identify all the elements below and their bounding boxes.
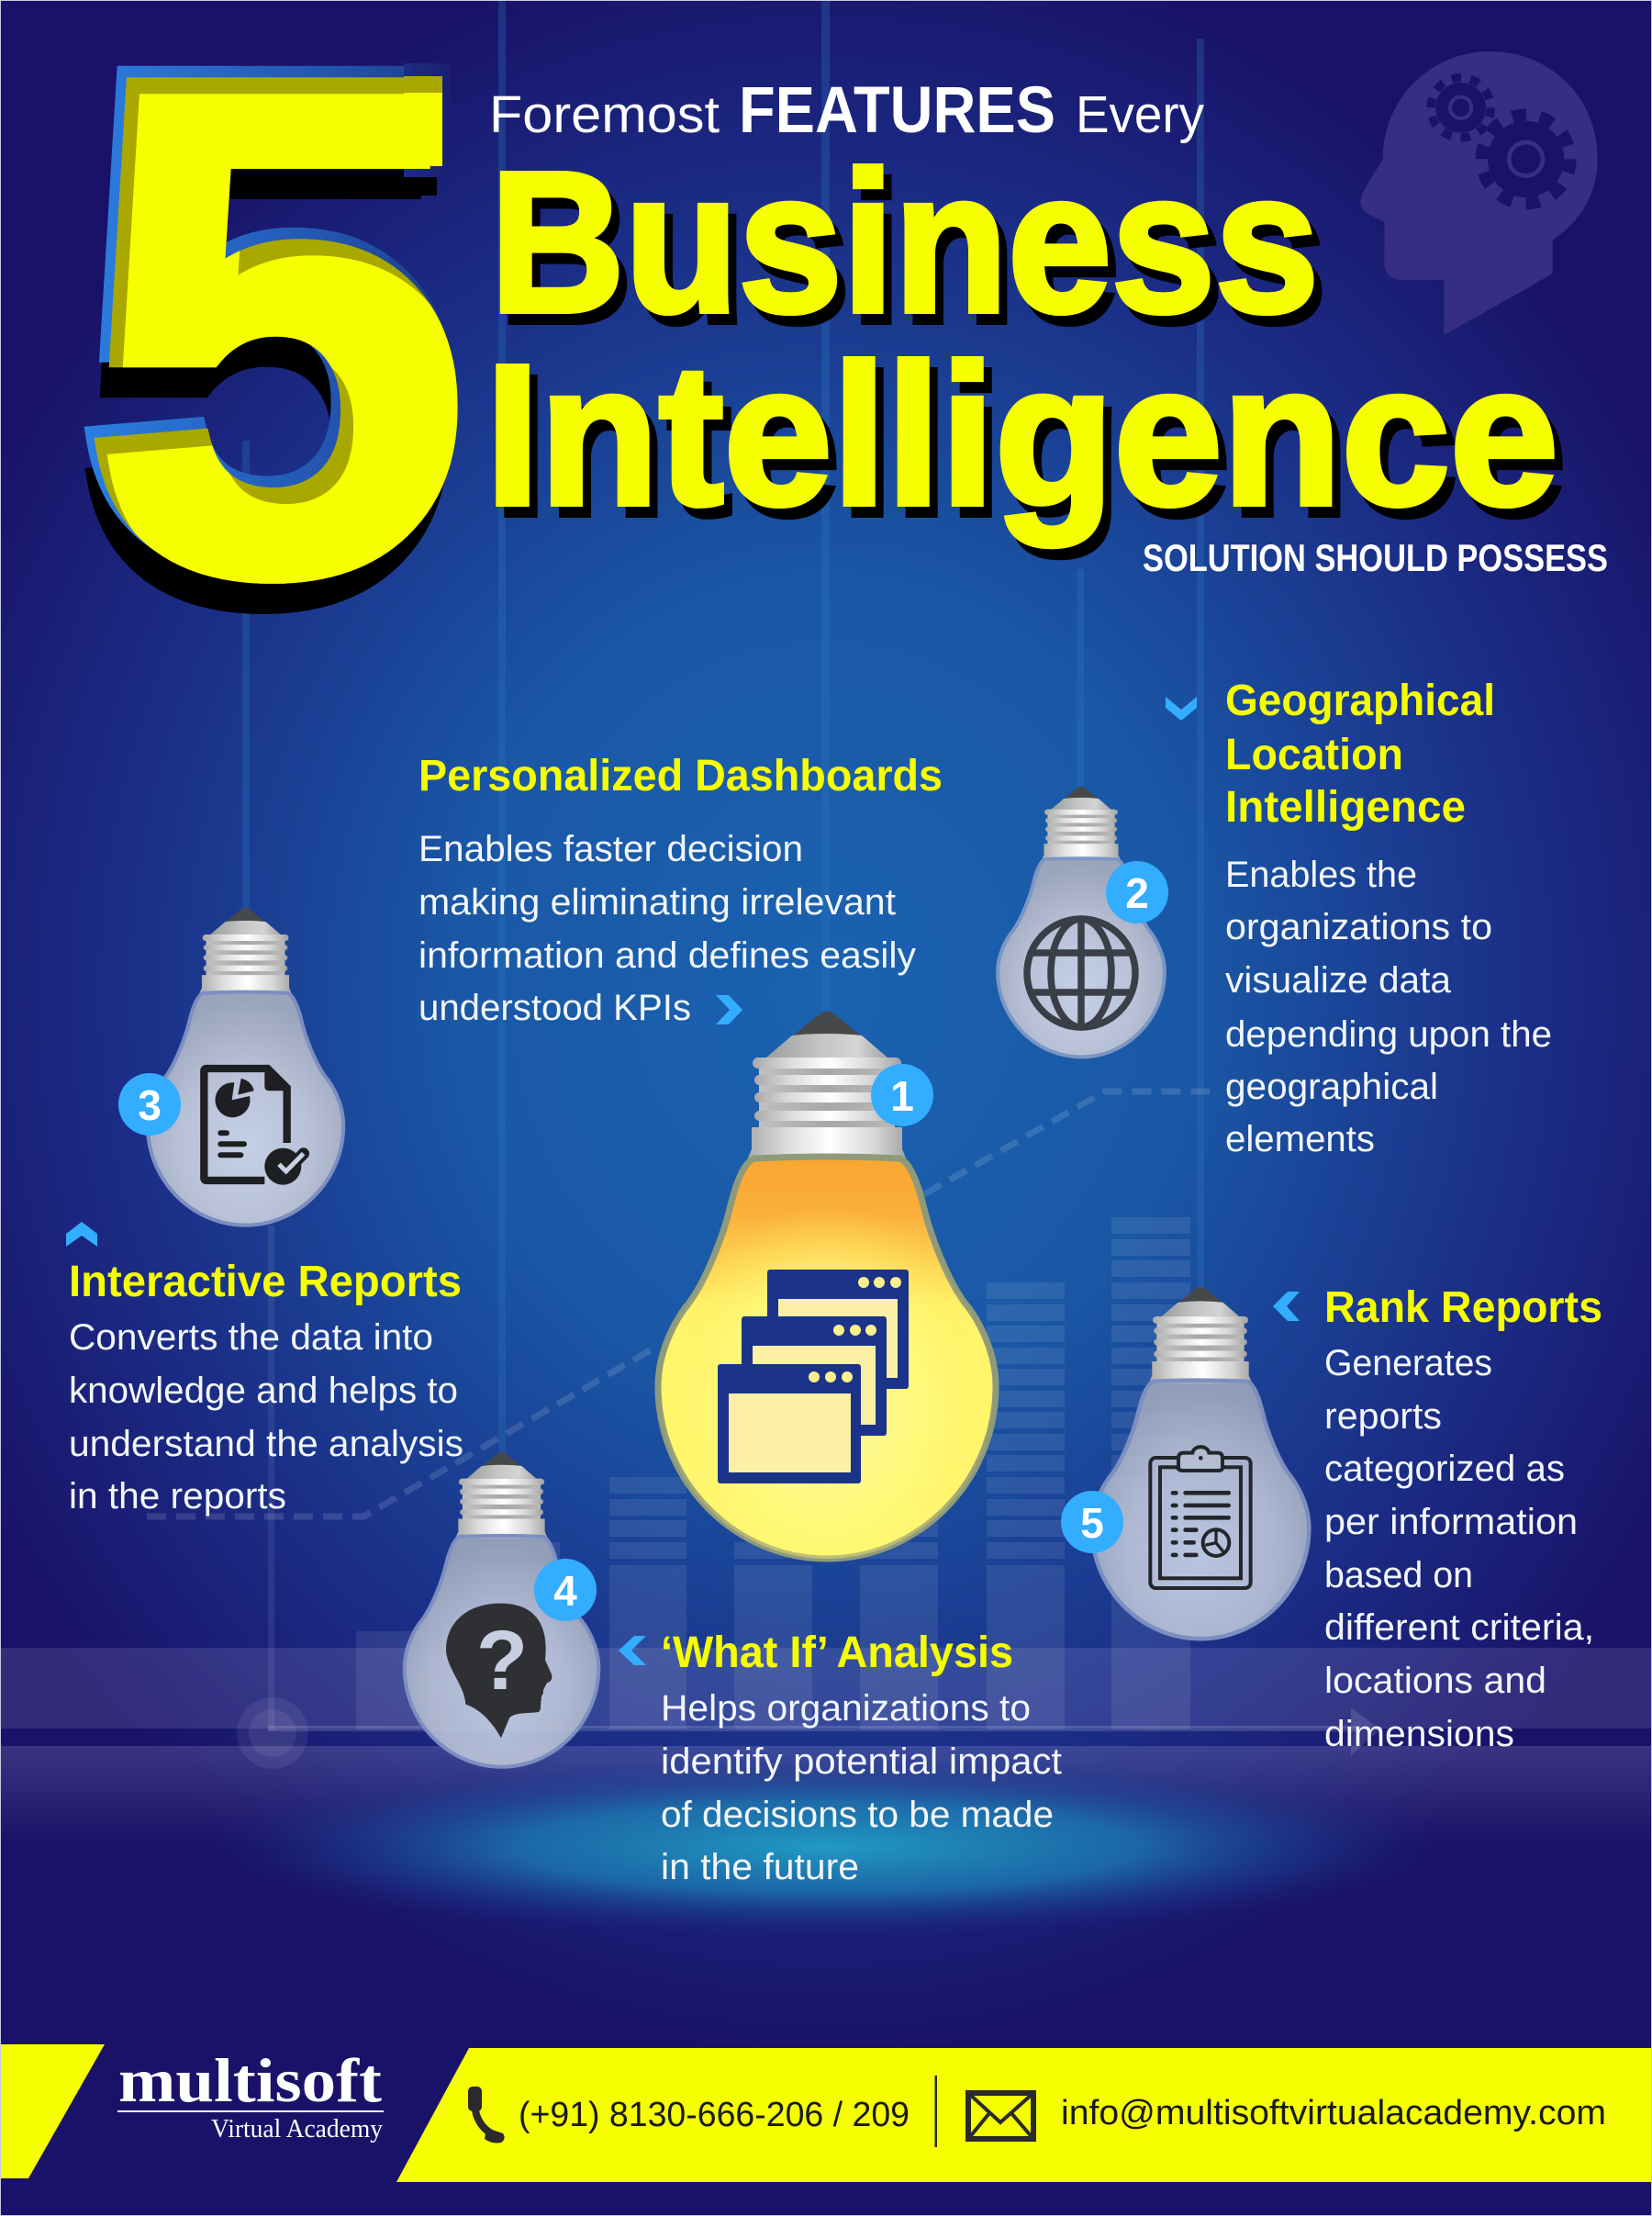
- text block: Personalized Dashboards: making eliminating irrelevant: [419, 882, 896, 923]
- icon: head with question mark: [446, 1604, 552, 1738]
- badge 3: 3: [138, 1081, 162, 1129]
- text block: Rank Reports: [1324, 1283, 1602, 1754]
- badge 3: [118, 1073, 181, 1136]
- email address: info@multisoftvirtualacademy.com: [1061, 2094, 1606, 2132]
- text block: Interactive Reports: Interactive Reports: [69, 1258, 462, 1306]
- arrow: right chevron: [716, 995, 742, 1024]
- text block: Geographical Location Intelligence: geographical: [1225, 1067, 1438, 1107]
- arrow: left chevron: [619, 1636, 646, 1665]
- badge 1: [871, 1064, 933, 1126]
- icon: head with question mark: ?: [476, 1614, 528, 1707]
- text block: Geographical Location Intelligence: visualize data: [1225, 960, 1452, 1001]
- text block: What If Analysis: ‘What If’ Analysis: [661, 1628, 1013, 1677]
- text block: Interactive Reports: understand the analysis: [69, 1424, 463, 1464]
- bottom glow: [202, 1757, 1450, 1937]
- text block: Interactive Reports: knowledge and helps to: [69, 1371, 458, 1411]
- icon: head with gears: [1360, 51, 1598, 335]
- text block: What If Analysis: of decisions to be made: [661, 1795, 1054, 1835]
- subtitle line: FEATURES: [739, 74, 1055, 147]
- text block: Rank Reports: Rank Reports: [1324, 1283, 1602, 1332]
- background floor bands: [0, 1648, 1652, 1847]
- badge 4: [534, 1559, 597, 1621]
- text block: Rank Reports: per information: [1324, 1502, 1578, 1542]
- bulb 1: lit: [658, 1012, 996, 1559]
- text block: Rank Reports: dimensions: [1324, 1714, 1514, 1754]
- subtitle line: [489, 74, 1204, 147]
- arrow: left chevron: [1273, 1292, 1300, 1321]
- badge 5: 5: [1080, 1499, 1104, 1547]
- text block: Rank Reports: categorized as: [1324, 1449, 1565, 1489]
- text block: Personalized Dashboards: Enables faster decision: [419, 829, 803, 869]
- text block: Geographical Location Intelligence: organizations to: [1225, 907, 1492, 947]
- text block: Rank Reports: locations and: [1324, 1661, 1546, 1701]
- arrow: down chevron: [1166, 697, 1197, 721]
- text block: Geographical Location Intelligence: Location: [1225, 731, 1403, 779]
- heading: [486, 131, 1558, 547]
- text block: Rank Reports: different criteria,: [1324, 1607, 1594, 1648]
- title: [486, 74, 1608, 579]
- icon: globe: [1027, 919, 1135, 1027]
- heading shadow: Intelligence: [494, 335, 1567, 558]
- footer: contact band: [396, 2048, 1652, 2182]
- background hanging cords: [242, 0, 1204, 1460]
- text block: Rank Reports: reports: [1324, 1396, 1442, 1437]
- icon: clipboard report: [1150, 1447, 1251, 1588]
- bulb 2: [998, 787, 1165, 1057]
- badge 4: 4: [553, 1567, 577, 1615]
- heading: Business: [490, 131, 1319, 354]
- text block: Personalized Dashboards: understood KPIs: [419, 988, 691, 1028]
- text block: What If Analysis: identify potential impact: [661, 1741, 1062, 1782]
- text block: Geographical Location Intelligence: depending upon the: [1225, 1014, 1552, 1055]
- phone number: (+91) 8130-666-206 / 209: [519, 2096, 910, 2134]
- bulb 5: [1092, 1287, 1309, 1639]
- heading: Intelligence: [486, 324, 1558, 547]
- text block: Geographical Location Intelligence: elements: [1225, 1119, 1375, 1159]
- text block: Geographical Location Intelligence: Enables the: [1225, 855, 1417, 895]
- bulb 4: [405, 1452, 598, 1767]
- text block: What If Analysis: in the future: [661, 1847, 859, 1887]
- badge 2: [1106, 861, 1168, 923]
- footer: logo: [117, 2045, 384, 2143]
- footer: left yellow tab: [0, 2044, 105, 2178]
- dashed trend line: [147, 1091, 1215, 1517]
- text block: Geographical Location Intelligence: [1225, 677, 1552, 1159]
- badge 1: 1: [890, 1072, 914, 1120]
- subtitle line: Every: [1076, 85, 1204, 144]
- text block: Interactive Reports: Converts the data into: [69, 1317, 433, 1358]
- icon: envelope: [968, 2093, 1033, 2139]
- text block: Rank Reports: Generates: [1324, 1343, 1492, 1383]
- background bar chart: [356, 1217, 1190, 1729]
- text block: Interactive Reports: [69, 1258, 463, 1517]
- text block: Geographical Location Intelligence: Geographical: [1225, 677, 1495, 725]
- text block: Personalized Dashboards: [419, 752, 943, 1028]
- chart axes: [237, 1226, 1380, 1769]
- badge 5: [1061, 1491, 1123, 1553]
- bulb 3: [148, 908, 343, 1226]
- heading shadow: [494, 142, 1567, 558]
- text block: What If Analysis: [661, 1628, 1062, 1887]
- icon: report document: [204, 1066, 304, 1185]
- text block: Geographical Location Intelligence: Intelligence: [1225, 783, 1466, 832]
- text block: Personalized Dashboards: Personalized Dashboards: [419, 752, 943, 800]
- arrow: up chevron: [66, 1222, 97, 1247]
- heading shadow: Business: [498, 142, 1327, 365]
- subtitle line: Foremost: [489, 85, 720, 144]
- badge 2: 2: [1125, 869, 1149, 917]
- footer: logo: multisoft: [118, 2045, 382, 2115]
- text block: Rank Reports: based on: [1324, 1555, 1473, 1595]
- icon: phone: [468, 2087, 505, 2143]
- icon: stacked windows: [718, 1270, 909, 1483]
- text block: What If Analysis: Helps organizations to: [661, 1688, 1031, 1729]
- text block: Personalized Dashboards: information and defines easily: [419, 935, 916, 976]
- text block: Interactive Reports: in the reports: [69, 1476, 286, 1517]
- footer: logo: Virtual Academy: [211, 2115, 383, 2143]
